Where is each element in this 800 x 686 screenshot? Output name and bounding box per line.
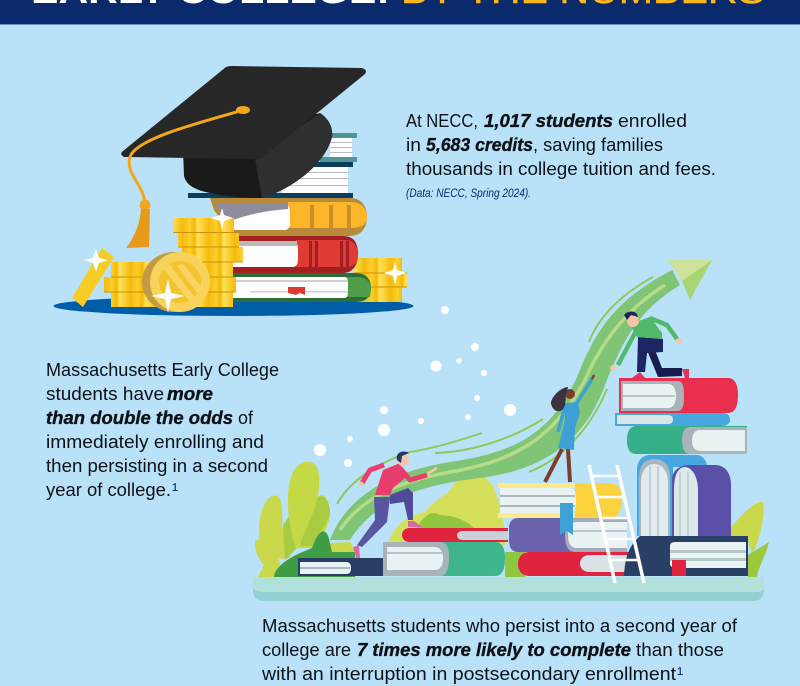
- text: seven times more likely: than those: [636, 639, 724, 660]
- sparkles: [84, 208, 406, 313]
- yellow book: [498, 483, 622, 518]
- green book: [233, 273, 371, 302]
- text: NECC enrollment: 5,683 credits: [426, 134, 533, 155]
- text: seven times more likely: ¹: [677, 663, 683, 684]
- blue thin book: [615, 413, 730, 426]
- red top book: [619, 378, 738, 413]
- graduation cap: [121, 66, 366, 198]
- text: NECC enrollment: , saving families: [533, 134, 663, 155]
- teal and navy books: [188, 133, 357, 198]
- left coin stacks: [104, 218, 243, 307]
- text: NECC enrollment: enrolled: [618, 110, 687, 131]
- orange book: [210, 198, 367, 236]
- red lower book: [518, 552, 632, 576]
- text: seven times more likely: 7 times more likely to complete: [357, 639, 631, 660]
- text: double the odds: than double the odds: [46, 407, 233, 428]
- text: double the odds: then persisting in a second: [46, 455, 268, 476]
- ladder: [589, 465, 644, 583]
- text: seven times more likely: [261, 615, 738, 684]
- green large book: [383, 542, 505, 576]
- runner figure: [353, 451, 437, 558]
- data source: (Data: NECC, Spring 2024).: [406, 188, 531, 200]
- man kneeling figure: [610, 311, 689, 378]
- text: seven times more likely: Massachusetts students who persist into a second year of: [262, 615, 738, 636]
- blue ground ellipse: [54, 296, 414, 316]
- right bush: [731, 502, 769, 577]
- blue bookmark: [560, 503, 573, 535]
- text: double the odds: of: [238, 407, 254, 428]
- left bushes: [255, 462, 355, 577]
- text: double the odds: ¹: [172, 479, 178, 500]
- red book: [233, 236, 358, 273]
- text: NECC enrollment: At NECC,: [406, 110, 478, 131]
- text: NECC enrollment: in: [406, 134, 421, 155]
- purple book: [509, 518, 627, 552]
- text: double the odds: more: [167, 383, 213, 404]
- text: seven times more likely: with an interruption in postsecondary enrollment: [261, 663, 677, 684]
- large coin: [142, 252, 210, 312]
- text: NECC enrollment: [406, 110, 716, 200]
- navy large book: [624, 536, 748, 576]
- illustration: graduation cap, books and coins: [54, 66, 414, 316]
- red thin book: [402, 528, 508, 542]
- green top book: [627, 426, 747, 454]
- text: double the odds: year of college.: [46, 479, 171, 500]
- right coin stack: [353, 258, 407, 302]
- illustration: climbing the books: [253, 260, 769, 601]
- title: [31, 0, 765, 12]
- text: NECC enrollment: thousands in college tuition and fees.: [406, 158, 716, 179]
- vertical books: [637, 455, 731, 536]
- navy small book: [298, 558, 388, 576]
- text: NECC enrollment: 1,017 students: [484, 110, 613, 131]
- leaning coin: [72, 248, 114, 307]
- tassel: [126, 106, 250, 248]
- text: double the odds: students have: [46, 383, 164, 404]
- text: double the odds: immediately enrolling and: [46, 431, 264, 452]
- text: double the odds: Massachusetts Early College: [46, 359, 279, 380]
- woman reaching figure: [545, 375, 594, 482]
- green growth arrow: [330, 260, 712, 540]
- floating dots: [314, 306, 516, 467]
- text: double the odds: [46, 359, 279, 500]
- bush behind runner: [388, 473, 525, 577]
- text: seven times more likely: college are: [262, 639, 351, 660]
- platform: [253, 577, 764, 601]
- header banner: [0, 0, 800, 25]
